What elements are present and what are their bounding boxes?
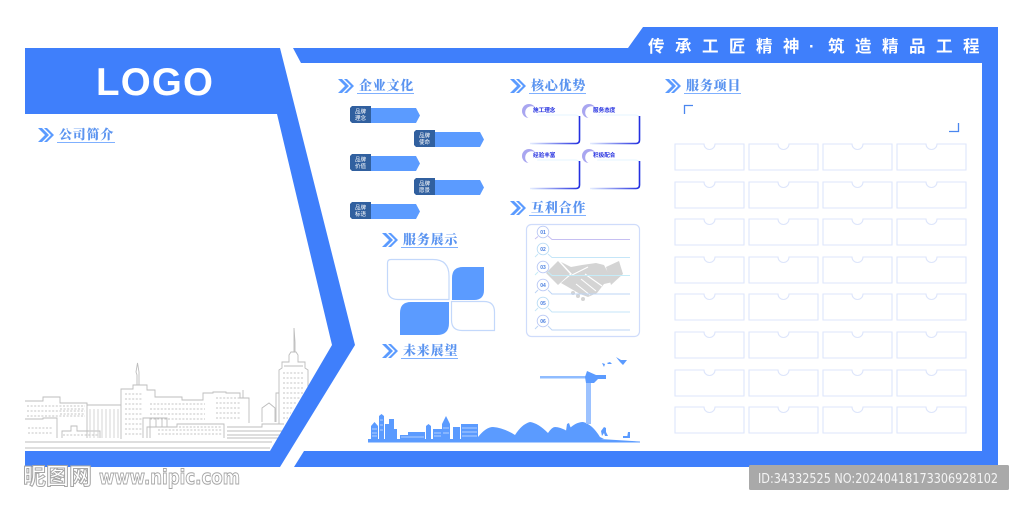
illustration: city and construction skyline — [368, 357, 640, 442]
ground line — [368, 439, 640, 442]
watermark: nipic logo: 昵图网 — [23, 464, 92, 490]
row numbers: 04 — [540, 283, 546, 289]
watermark: nipic logo: www.nipic.com — [99, 465, 240, 489]
workers — [566, 423, 630, 438]
row numbers — [540, 230, 546, 325]
tile: top left — [388, 260, 449, 300]
heading: mutual cooperation: 互利合作 — [531, 200, 586, 215]
window rows — [27, 373, 303, 438]
card: service attitude: 服务态度 — [593, 106, 616, 114]
item: brand mission: 品牌 — [419, 132, 430, 140]
heading: service showcase: 服务展示 — [403, 232, 459, 247]
row numbers: 03 — [540, 265, 546, 271]
row numbers: 02 — [540, 247, 546, 253]
heading: service showcase — [382, 232, 459, 248]
tile: top right — [452, 267, 484, 300]
panel: corporate culture list — [350, 106, 484, 219]
item: brand slogan: 标语 — [355, 210, 366, 218]
tower crane — [540, 371, 606, 424]
tile: bottom left — [400, 302, 449, 335]
slogan title: 品 — [909, 38, 926, 56]
slogan title: 神 — [783, 37, 800, 56]
item: brand value: 价值 — [355, 162, 366, 170]
heading: mutual cooperation — [510, 200, 586, 216]
logo: LOGO — [96, 61, 213, 104]
service items: corner marks — [684, 106, 958, 132]
illustration: line-art city skyline — [25, 328, 308, 448]
heading: service items — [665, 78, 741, 94]
item: brand concept: 品牌 — [355, 108, 366, 116]
heading: company profile: 公司简介 — [59, 127, 114, 143]
panel: service showcase tiles — [388, 260, 494, 335]
slogan title: 匠 — [729, 38, 746, 56]
top, right and bottom frame — [293, 27, 998, 467]
item: brand slogan — [350, 202, 420, 219]
heading: core advantages — [510, 78, 586, 94]
hills — [478, 422, 604, 439]
slogan title: 承 — [675, 37, 692, 56]
card: rich experience: 经验丰富 — [533, 151, 556, 159]
item: brand vision — [414, 178, 484, 195]
heading: future outlook: 未来展望 — [403, 343, 458, 358]
slogan title: · — [809, 38, 814, 56]
item: brand value: 品牌 — [355, 156, 366, 164]
item: brand mission — [414, 130, 484, 147]
list rows — [535, 226, 630, 330]
slogan title: 工 — [702, 38, 718, 56]
city buildings — [371, 414, 478, 439]
item: brand slogan: 品牌 — [355, 204, 366, 212]
slogan title: 程 — [963, 37, 980, 56]
slogan title: 传 — [648, 37, 664, 56]
panel: cooperation list — [526, 224, 640, 336]
item: brand value — [350, 154, 420, 171]
slogan title: 造 — [855, 37, 872, 56]
heading: service items: 服务项目 — [686, 78, 741, 93]
slogan title: 工 — [936, 38, 952, 56]
heading: corporate culture: 企业文化 — [359, 78, 414, 93]
card: construction concept: 施工理念 — [533, 106, 556, 114]
birds — [602, 357, 627, 367]
item: brand vision: 愿景 — [419, 187, 430, 194]
row numbers: 06 — [540, 319, 546, 325]
slogan title: 精 — [882, 37, 898, 56]
icon: handshake — [546, 261, 623, 301]
row numbers: 05 — [540, 301, 546, 307]
item: brand concept — [350, 106, 420, 123]
row numbers: 01 — [540, 230, 546, 236]
watermark: image id — [749, 465, 1009, 490]
slogan title: 精 — [756, 37, 772, 56]
logo block and chevron band — [25, 48, 355, 467]
tile: bottom right — [452, 302, 494, 330]
card: active cooperation: 积极配合 — [593, 151, 616, 159]
slogan title: 筑 — [828, 36, 845, 56]
item: brand mission: 使命 — [419, 138, 430, 146]
heading: company profile — [38, 127, 115, 143]
heading: future outlook — [382, 343, 458, 359]
item: brand vision: 品牌 — [419, 180, 430, 188]
heading: core advantages: 核心优势 — [531, 78, 586, 94]
watermark: nipic logo — [23, 464, 240, 490]
service items: card grid — [675, 144, 966, 433]
item: brand concept: 理念 — [355, 114, 366, 122]
heading: corporate culture — [338, 78, 414, 94]
panel: core advantages cards — [522, 104, 640, 189]
